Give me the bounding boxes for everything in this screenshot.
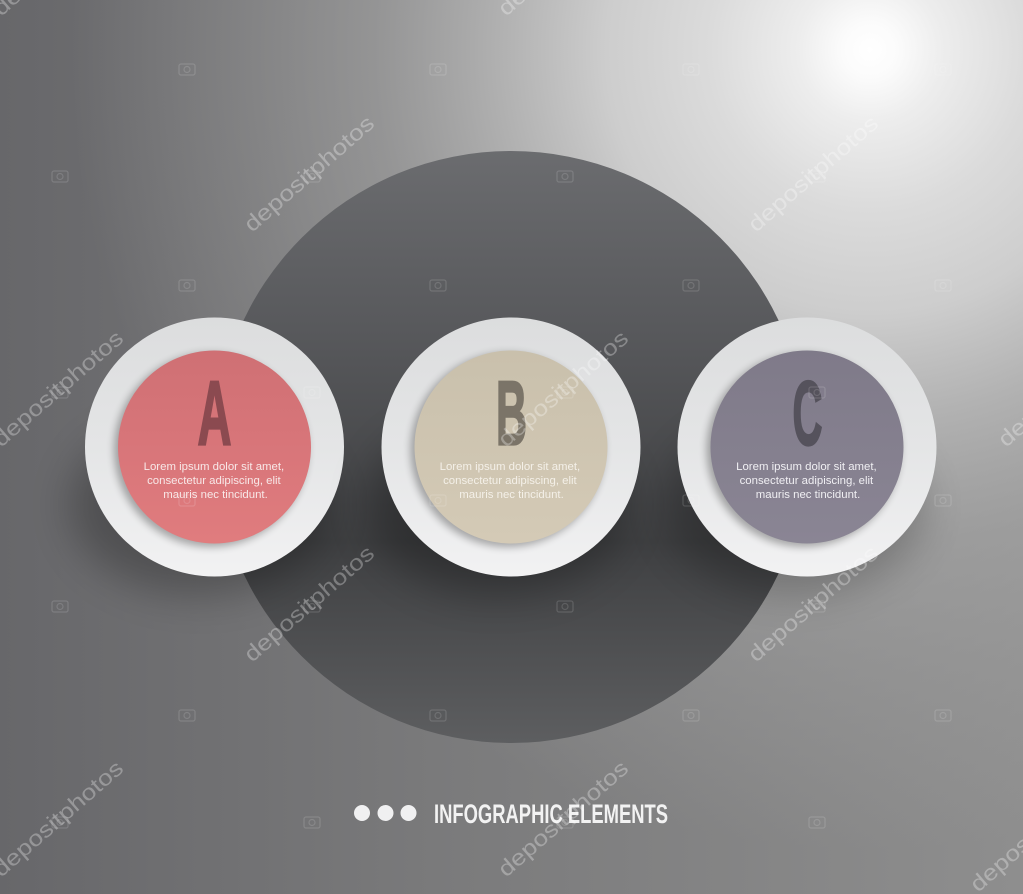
- disc shadow A: [114, 353, 308, 547]
- watermarks: depositphotos: [239, 540, 379, 667]
- body text C: consectetur adipiscing, elit: [740, 475, 874, 487]
- camera watermark icons: [52, 64, 951, 828]
- disc A: [118, 350, 311, 544]
- letter A: A: [198, 364, 232, 464]
- three white dots: [354, 805, 416, 821]
- body text A: mauris nec tincidunt.: [163, 489, 268, 501]
- disc C: [710, 350, 904, 544]
- ring A: [85, 318, 344, 576]
- large dark central circle: [215, 151, 807, 743]
- body text C: mauris nec tincidunt.: [756, 489, 860, 501]
- body text A: Lorem ipsum dolor sit amet,: [144, 461, 284, 473]
- watermarks: depositphotos: [743, 540, 883, 667]
- disc B: [414, 350, 608, 544]
- body text A: consectetur adipiscing, elit: [147, 475, 282, 487]
- circle C: C: [792, 364, 822, 464]
- body text B: Lorem ipsum dolor sit amet,: [440, 461, 580, 473]
- disc shadow B: [410, 353, 604, 547]
- ring shadow B: [367, 415, 627, 595]
- ring B: [382, 318, 640, 576]
- watermarks: depositphotos: [493, 755, 633, 882]
- watermarks: depositphotos: [743, 110, 883, 237]
- circle B: B: [496, 364, 527, 464]
- circle C: [665, 318, 936, 595]
- circle A: [70, 318, 344, 595]
- watermarks: depositphotos: [239, 110, 379, 237]
- watermarks: depositphotos: [493, 325, 633, 452]
- ring C: [678, 318, 936, 576]
- ring shadow A: [70, 415, 330, 595]
- circle B: [367, 318, 640, 595]
- body text C: Lorem ipsum dolor sit amet,: [736, 461, 877, 473]
- title: INFOGRAPHIC ELEMENTS: [434, 799, 668, 829]
- disc shadow C: [706, 353, 900, 547]
- body text B: consectetur adipiscing, elit: [443, 475, 578, 487]
- body text B: mauris nec tincidunt.: [459, 489, 564, 501]
- ring shadow C: [665, 415, 925, 595]
